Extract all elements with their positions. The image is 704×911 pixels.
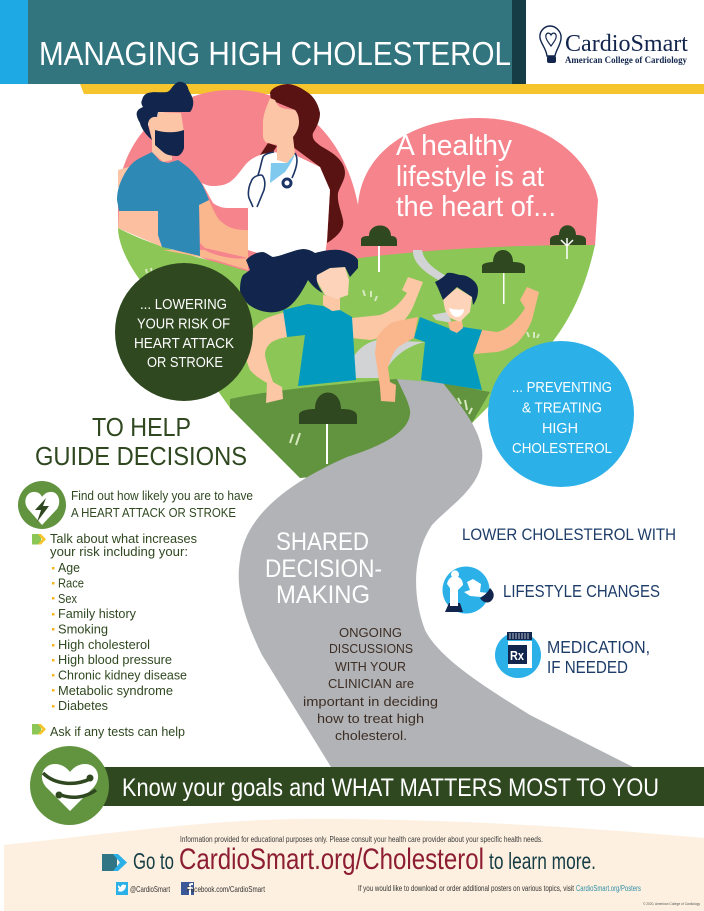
facebook: Facebook.com/CardioSmart: [187, 884, 265, 894]
text: find out how likely: Find out how likely you are to have: [71, 489, 253, 503]
CardioSmart logo: CardioSmart: [565, 31, 688, 57]
disclaimer: Information provided for educational purposes only. Please consult your health care provider about your specific health needs.: [180, 835, 543, 844]
callout: preventing and treating: & TREATING: [522, 400, 602, 416]
icon: heart hug: [30, 746, 109, 825]
text: find out how likely: A HEART ATTACK OR STROKE: [71, 505, 236, 520]
heading: to help guide decisions: TO HELP: [92, 412, 191, 442]
icon: lifestyle changes: [442, 566, 494, 614]
text: lifestyle changes: LIFESTYLE CHANGES: [503, 581, 660, 601]
woman running: [240, 249, 423, 403]
callout: preventing and treating: CHOLESTEROL: [512, 440, 612, 457]
bullet arrow: talk about: [32, 534, 46, 544]
banner: know your goals: [85, 767, 704, 806]
go-to arrow: [102, 854, 127, 871]
man running: [375, 273, 539, 402]
risk factor list: [52, 560, 187, 713]
risk factor list: Diabetes: [58, 698, 108, 713]
heading: to help guide decisions: GUIDE DECISIONS: [35, 441, 247, 471]
icon: medication bottle: [495, 632, 541, 678]
risk factor list: Smoking: [58, 622, 108, 636]
light green field: [118, 228, 595, 478]
callout: lowering your risk: YOUR RISK OF: [137, 316, 230, 332]
icon: heart with lightning: [18, 481, 66, 529]
pink heart: [118, 90, 598, 275]
callout: A healthy lifestyle: [396, 130, 556, 223]
text: medication if needed: MEDICATION,: [547, 637, 650, 657]
road: [239, 379, 633, 767]
text: talk about what increases: [50, 531, 197, 559]
text: ongoing discussions: ONGOING: [339, 625, 402, 640]
callout: A healthy lifestyle: A healthy: [396, 130, 512, 162]
callout: A healthy lifestyle: lifestyle is at: [396, 161, 544, 193]
risk factor list: Age: [58, 560, 80, 575]
heading: lower cholesterol with: LOWER CHOLESTEROL WITH: [462, 526, 676, 544]
callout: preventing and treating: HIGH: [542, 420, 578, 437]
risk factor list: High blood pressure: [58, 652, 172, 667]
posters note: If you would like to download or order additional posters on various topics, visit: [358, 884, 575, 893]
text: ask if any tests: Ask if any tests can help: [50, 724, 185, 739]
heading: shared decision-making: DECISION-: [265, 555, 382, 583]
text: find out how likely: [71, 489, 253, 520]
text: talk about what increases: Talk about what increases: [50, 531, 197, 546]
stethoscope: [248, 152, 297, 207]
risk factor list: Metabolic syndrome: [58, 683, 173, 698]
callout: lowering your risk: OR STROKE: [147, 354, 223, 371]
risk factor list: Sex: [58, 591, 77, 606]
heading: shared decision-making: SHARED: [276, 528, 369, 556]
text: ongoing discussions: important in deciding: [303, 694, 438, 709]
text: ongoing discussions: CLINICIAN are: [328, 676, 414, 691]
call to action: Go to: [133, 848, 174, 874]
text: ongoing discussions: WITH YOUR: [335, 659, 406, 674]
twitter: @CardioSmart: [130, 884, 170, 894]
icon: medication bottle: Rx: [510, 648, 525, 663]
text: medication if needed: [547, 637, 650, 677]
tree far right: [550, 225, 586, 259]
doctor: [202, 84, 345, 260]
risk factor list: Race: [58, 576, 84, 590]
heading: shared decision-making: [265, 528, 382, 609]
tree on hill: [299, 392, 357, 464]
bullet arrow: ask: [32, 724, 46, 734]
CardioSmart logo: American College of Cardiology: [565, 55, 687, 65]
text: ongoing discussions: how to treat high: [317, 711, 424, 726]
text: talk about what increases: your risk including your:: [50, 544, 188, 559]
risk factor list: Family history: [58, 606, 136, 621]
call to action: to learn more.: [489, 848, 596, 874]
footer panel: [4, 819, 704, 911]
grass tufts: [146, 268, 539, 445]
posters note: CardioSmart.org/Posters: [576, 884, 641, 893]
call to action: CardioSmart.org/Cholesterol: [179, 843, 484, 876]
man patient: [117, 82, 248, 270]
dark green hill: [230, 379, 490, 478]
text: medication if needed: IF NEEDED: [547, 657, 628, 677]
callout: lowering your risk: ... LOWERING: [140, 296, 227, 313]
far road: [353, 250, 452, 378]
callout: preventing and treating: [488, 341, 634, 487]
callout: lowering your risk: HEART ATTACK: [134, 335, 234, 352]
title: MANAGING HIGH CHOLESTEROL: [39, 35, 511, 72]
text: ongoing discussions: [303, 625, 438, 743]
risk factor list: High cholesterol: [58, 637, 150, 652]
header banner: [0, 0, 704, 94]
tree right of road: [482, 250, 525, 304]
copyright: © 2020, American College of Cardiology: [643, 902, 700, 906]
heading: to help guide decisions: [35, 412, 247, 471]
risk factor list: Chronic kidney disease: [58, 668, 187, 682]
callout: preventing and treating: ... PREVENTING: [512, 379, 612, 396]
facebook: [181, 882, 265, 895]
CardioSmart logo: [540, 26, 688, 65]
twitter: [116, 882, 170, 895]
heart landscape illustration: [118, 90, 633, 767]
callout: lowering your risk: [115, 263, 253, 401]
text: ongoing discussions: cholesterol.: [335, 728, 407, 743]
heading: shared decision-making: MAKING: [276, 581, 370, 609]
tree left: [361, 226, 397, 272]
text: ongoing discussions: DISCUSSIONS: [329, 641, 413, 656]
callout: A healthy lifestyle: the heart of...: [396, 191, 556, 223]
